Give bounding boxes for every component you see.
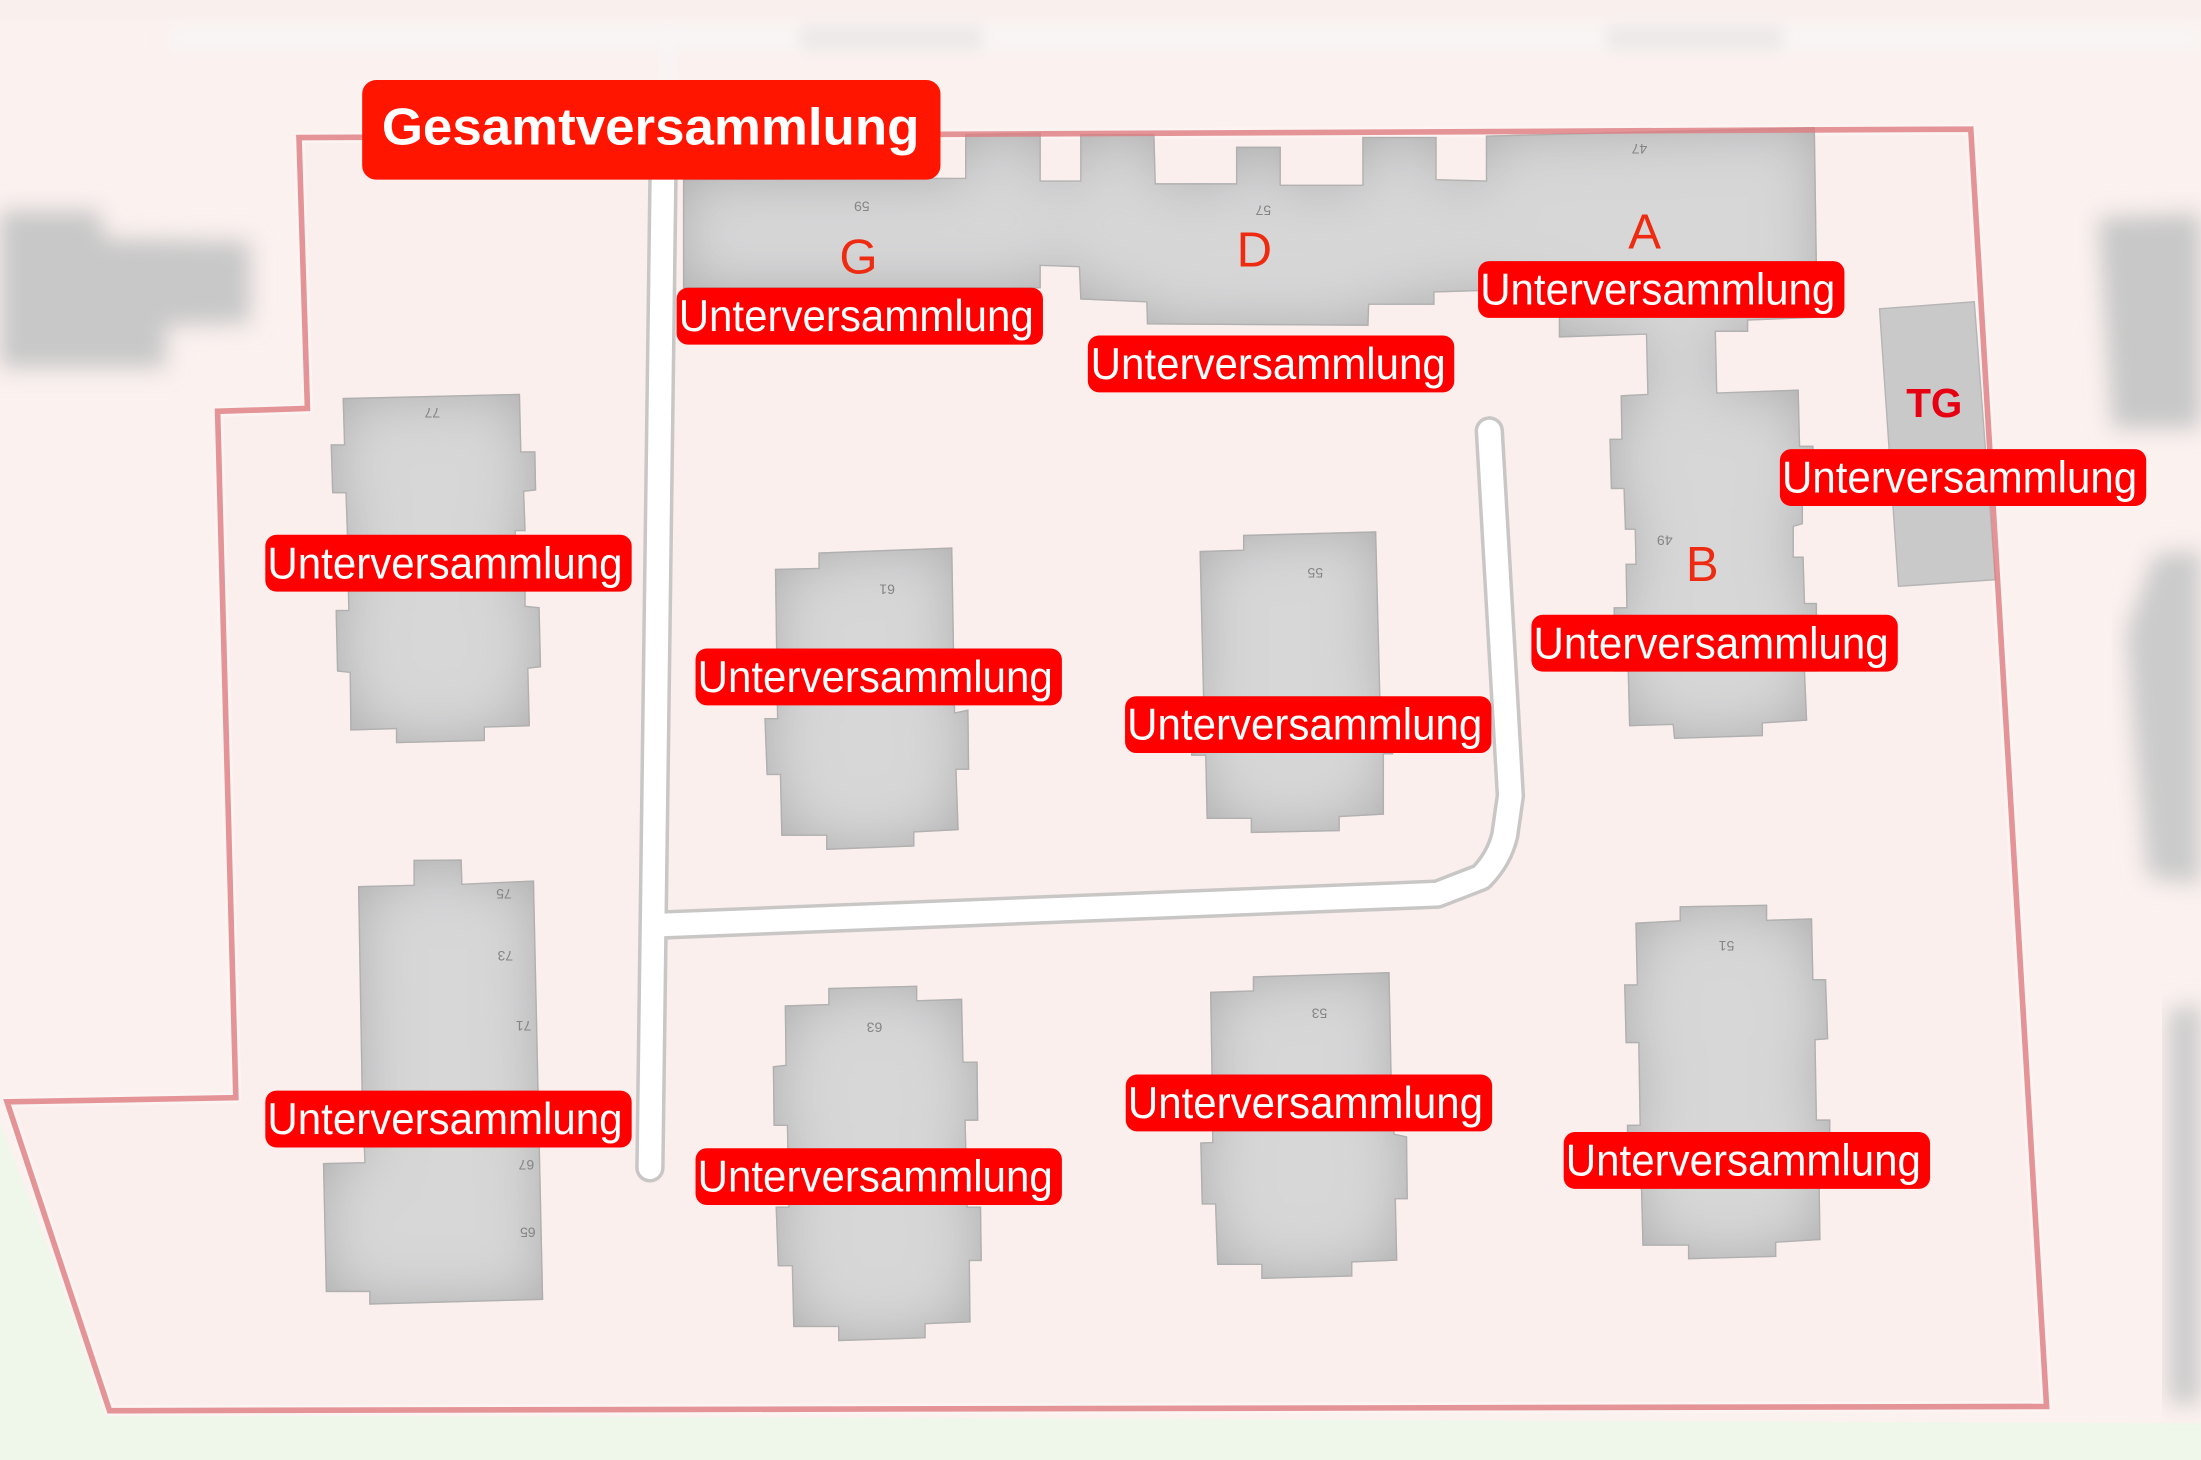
building: long wing 47-59 with 49: 59	[854, 198, 870, 214]
building 53: 53	[1311, 1006, 1327, 1022]
building 61	[765, 548, 969, 849]
building 51	[1625, 905, 1830, 1259]
building: long wing 47-59 with 49: 49	[1657, 532, 1673, 548]
building letter TG: TG	[1906, 380, 1962, 426]
building 61: 61	[879, 582, 895, 598]
building 53	[1201, 973, 1407, 1278]
building 65-75: 73	[497, 948, 513, 964]
building letter A: A	[1628, 205, 1661, 259]
building letter B: B	[1686, 538, 1719, 592]
label: Unterversammlung building 65-75: Unterversammlung	[267, 1093, 623, 1144]
access roads	[650, 154, 1510, 1168]
building 65-75: 71	[516, 1018, 531, 1034]
label: Unterversammlung building 63: Unterversammlung	[698, 1151, 1053, 1202]
building 77	[331, 394, 540, 743]
building: long wing 47-59 with 49	[684, 128, 1817, 738]
label: Unterversammlung building 61: Unterversammlung	[698, 651, 1053, 702]
building letter G: G	[839, 231, 878, 285]
label: Unterversammlung building 55: Unterversammlung	[1127, 699, 1482, 750]
label: Unterversammlung building A: Unterversammlung	[1480, 264, 1835, 315]
building: long wing 47-59 with 49: 57	[1255, 203, 1271, 219]
label: Unterversammlung building 77: Unterversammlung	[267, 537, 623, 588]
building: underground garage TG	[1880, 302, 1995, 586]
building 65-75: 67	[518, 1157, 534, 1173]
building 51: 51	[1719, 938, 1734, 954]
label: Unterversammlung building 53: Unterversammlung	[1128, 1077, 1483, 1128]
building 63	[773, 986, 981, 1340]
building 65-75: 75	[496, 886, 512, 902]
title label: Gesamtversammlung: Gesamtversammlung	[382, 99, 919, 157]
building 65-75: 65	[520, 1224, 536, 1240]
building 65-75	[324, 860, 543, 1304]
title label: Gesamtversammlung	[362, 80, 940, 180]
label: Unterversammlung building G: Unterversammlung	[679, 290, 1034, 341]
building letter D: D	[1237, 224, 1272, 278]
building 55	[1192, 532, 1392, 832]
building 77: 77	[424, 405, 440, 421]
label: Unterversammlung building 51: Unterversammlung	[1566, 1135, 1921, 1186]
label: Unterversammlung building B: Unterversammlung	[1534, 617, 1889, 668]
label: Unterversammlung garage TG: Unterversammlung	[1782, 452, 2137, 503]
label: Unterversammlung building D: Unterversammlung	[1091, 338, 1446, 389]
building 55: 55	[1307, 565, 1323, 581]
building: long wing 47-59 with 49: 47	[1632, 141, 1647, 157]
building 63: 63	[867, 1020, 882, 1036]
